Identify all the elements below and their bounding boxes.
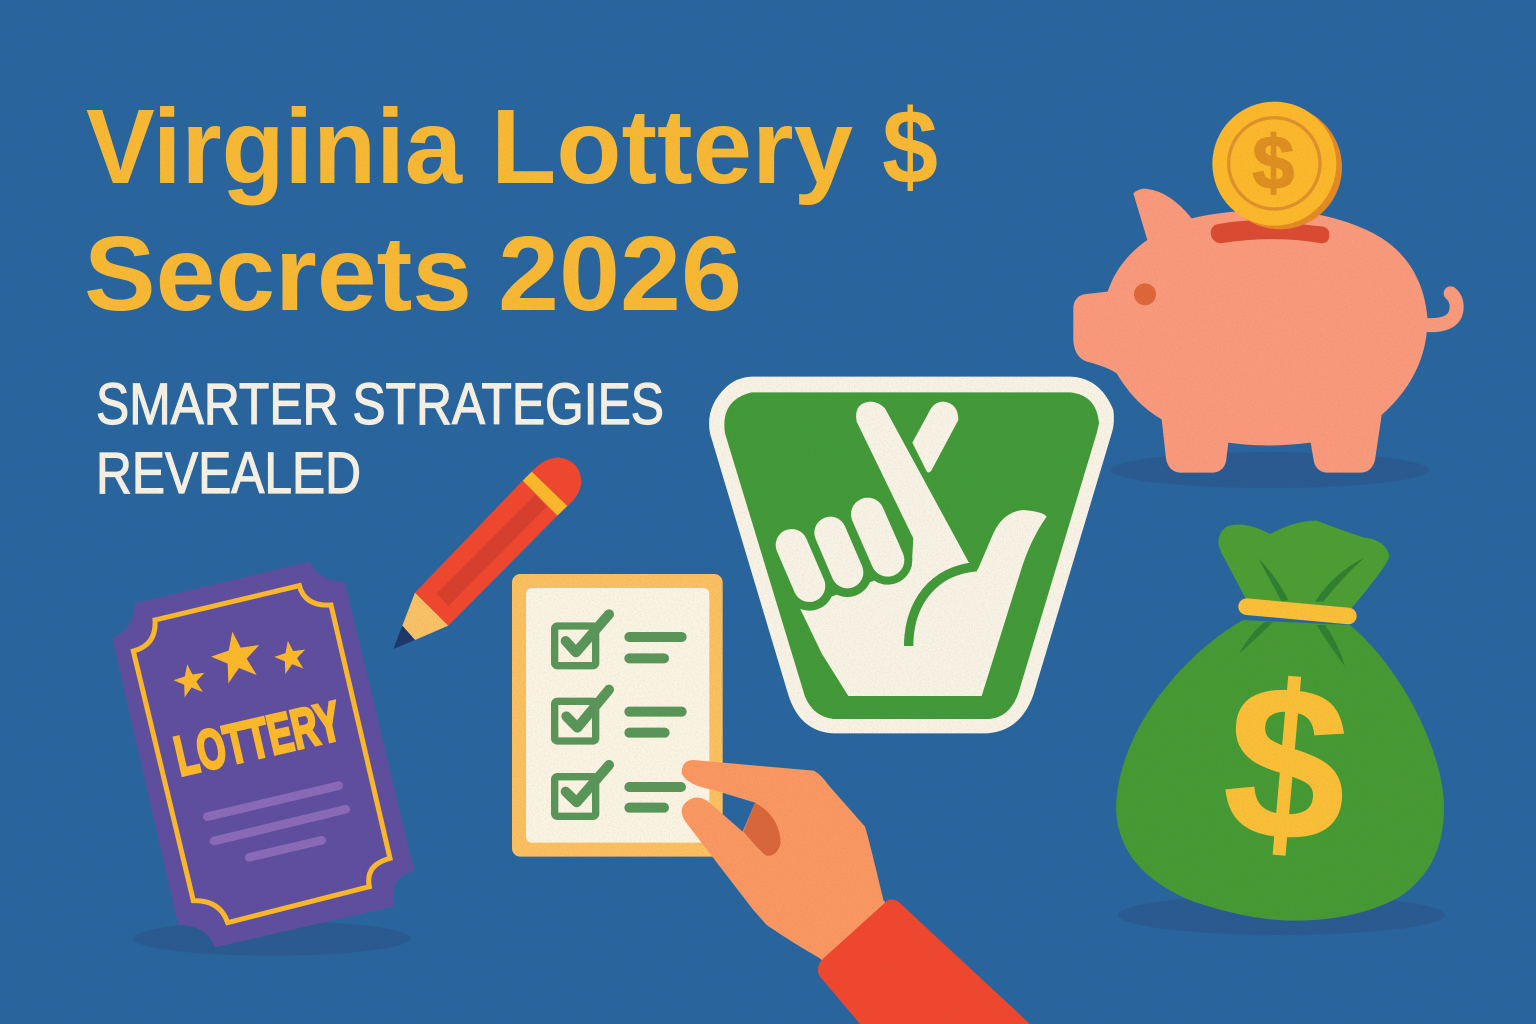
icon: piggy bank with coin: [1073, 102, 1457, 488]
icon: hand pointing at checklist: [682, 760, 1030, 1024]
panel: checklist: [512, 574, 723, 857]
title: [84, 88, 938, 333]
subtitle: REVEALED: [96, 441, 361, 506]
icon: lottery ticket: LOTTERY: [169, 689, 347, 788]
icon: money bag: [1116, 521, 1445, 935]
subtitle: [96, 372, 664, 506]
icon: money bag: $: [1215, 637, 1358, 890]
title: 2026: [498, 215, 742, 333]
icon: piggy bank with coin: $: [1252, 120, 1294, 204]
title: $: [882, 88, 938, 206]
icon: pencil: [393, 457, 581, 649]
subtitle: SMARTER STRATEGIES: [96, 372, 664, 437]
icon: lottery ticket: [112, 562, 414, 956]
title: Lottery: [491, 88, 853, 206]
icon: crossed fingers sign: [709, 377, 1114, 733]
title: Secrets: [84, 215, 472, 333]
title: Virginia: [86, 88, 463, 206]
